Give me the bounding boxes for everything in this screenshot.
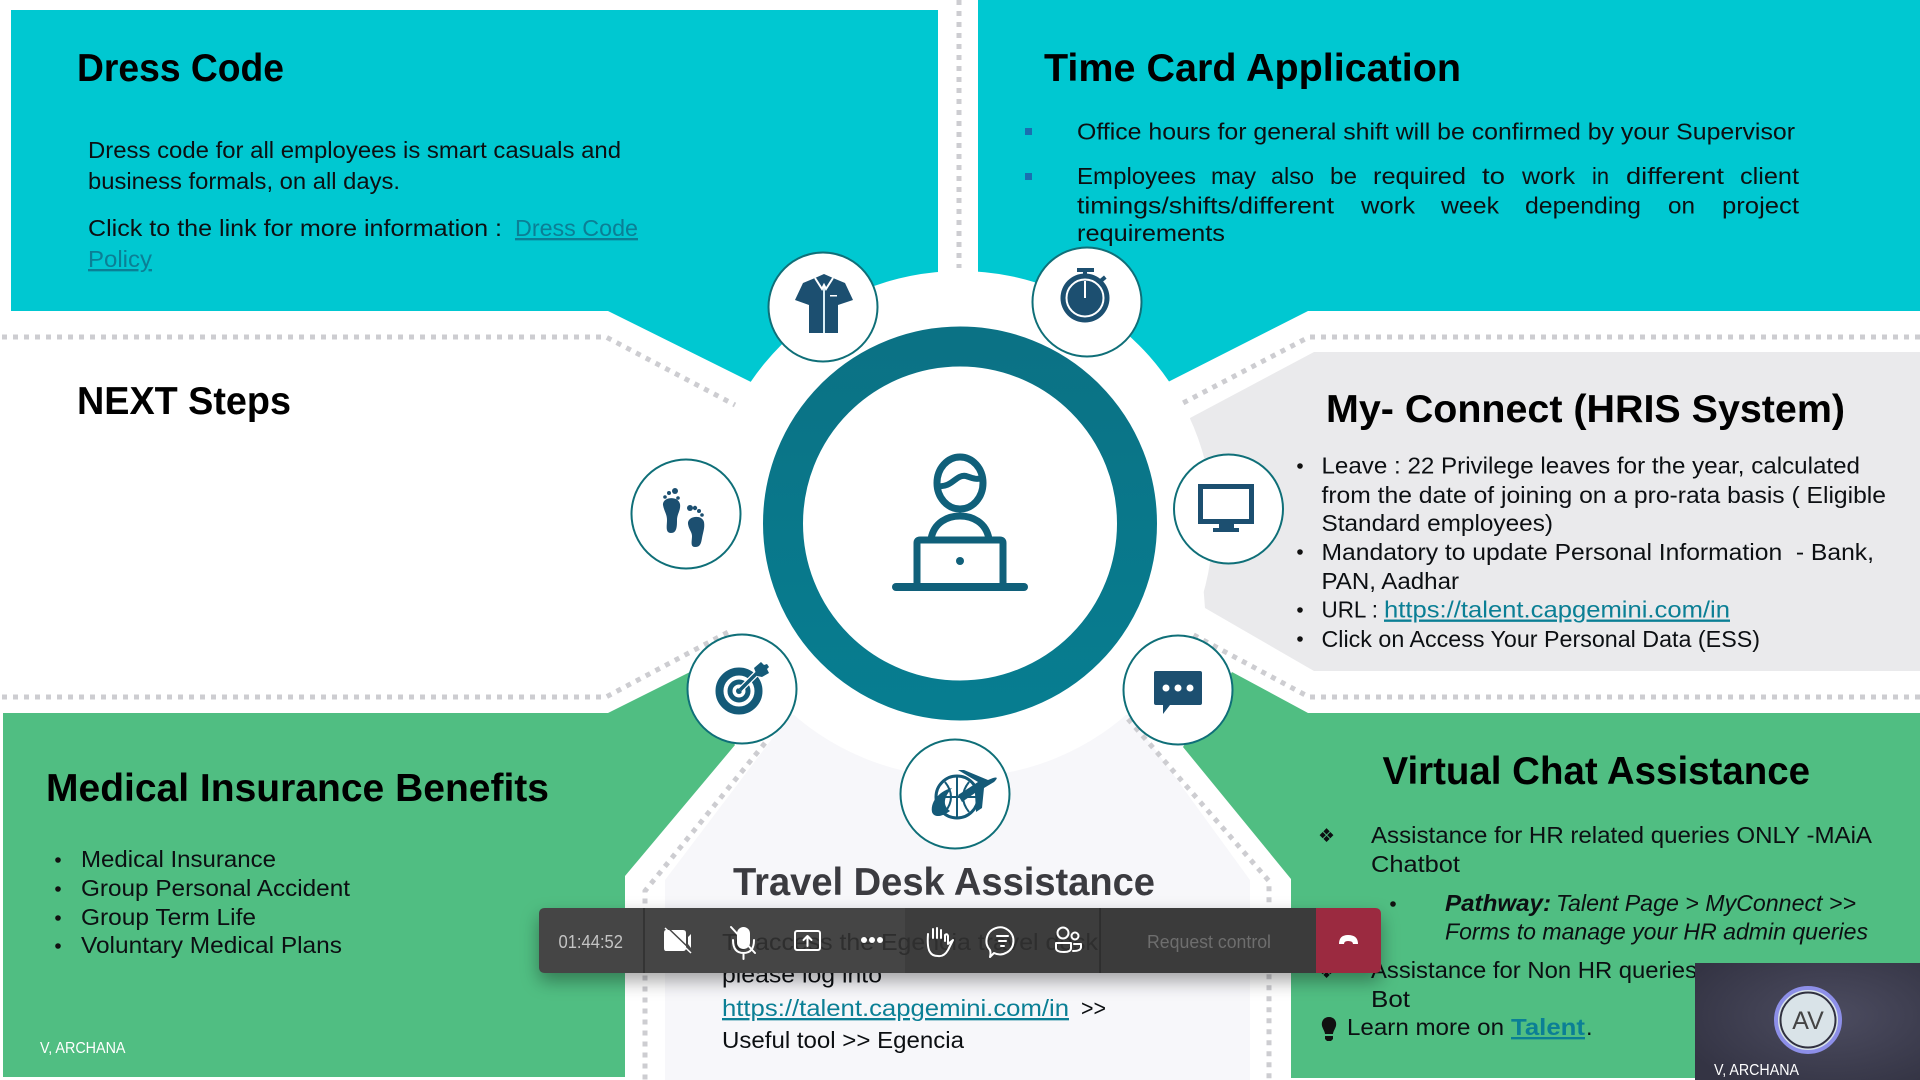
meeting toolbar: 01:44:52 [558,932,623,952]
dotted connector stub [956,0,962,268]
text: time card bullets: week [1440,192,1499,218]
text: my connect list: Click on Access Your Personal Data (ESS) [1322,626,1760,652]
central white disc [707,271,1213,777]
text: time card bullets: Office hours for general shift will be confirmed by your Supervisor [1077,118,1795,144]
presenter tile: V, ARCHANA [1714,1062,1799,1079]
node: time card stopwatch [1032,248,1142,356]
panel: travel desk background [665,715,1250,1080]
text: virtual chat list: Assistance for HR related queries ONLY -MAiA [1371,822,1872,848]
heading: virtual chat assistance: Virtual Chat Assistance [1382,750,1810,793]
text: virtual chat list: ❖ [1318,825,1335,847]
node: virtual chat bubble [1124,636,1232,744]
heading: medical insurance benefits: Medical Insurance Benefits [46,767,549,810]
panel: time card background [978,0,1920,382]
node: medical target [688,634,796,744]
text: travel desk body [722,962,1106,1053]
text: time card bullets: be [1330,163,1357,189]
icon: camera off [664,926,692,953]
text: virtual chat list: Pathway: [1445,890,1551,916]
text: travel desk body: please log into [722,962,882,988]
text: time card bullets: work [1521,163,1575,189]
text: virtual chat list: . [1586,1014,1593,1040]
text: virtual chat list: Chatbot [1371,851,1461,877]
text: time card bullets: timings/shifts/different [1077,192,1335,218]
text: virtual chat list: Learn more on [1347,1014,1504,1040]
text: time card bullets: Employees [1077,163,1196,189]
text: dress code body: business formals, on all days. [88,168,400,194]
text: time card bullets: also [1271,163,1314,189]
text: dress code body: Dress code for all employees is smart casuals and [88,137,621,163]
text: my connect list: URL : [1322,596,1378,622]
text: time card bullets: different [1626,163,1725,189]
text: time card bullets: to [1482,163,1505,189]
text: dress code body [88,137,638,272]
panel: virtual chat background [1183,672,1920,1078]
presenter name: V, ARCHANA [40,1040,126,1057]
text: my connect list [1297,452,1886,652]
heading: dress code: Dress Code [77,47,284,90]
text: travel desk body: https://talent.capgemini.com/in [722,995,1069,1021]
text: my connect list: https://talent.capgemini.com/in [1384,596,1730,622]
text: time card bullets: requirements [1077,220,1225,246]
icon: person at laptop [892,457,1028,591]
text: time card bullets: may [1211,163,1256,189]
icon: chat [986,927,1013,957]
presenter tile [1695,963,1920,1080]
text: my connect list: PAN, Aadhar [1322,568,1459,594]
panel: medical insurance background [3,672,735,1077]
text: time card bullets: in [1592,163,1609,189]
icon: share screen [795,931,820,950]
meeting toolbar: Request control [1147,932,1271,952]
text: virtual chat list: Forms to manage your HR admin queries [1445,918,1868,944]
heading: time card application: Time Card Application [1044,47,1461,90]
text: medical list: Group Personal Accident [81,875,350,901]
presenter tile: AV [1792,1007,1824,1035]
text: virtual chat list: Assistance for Non HR queries [1371,957,1697,983]
text: my connect list: from the date of joining on a pro-rata basis ( Eligible [1322,482,1886,508]
central ring [783,346,1137,700]
heading: travel desk assistance: Travel Desk Assistance [733,861,1155,904]
text: medical list: Voluntary Medical Plans [81,932,342,958]
text: dress code body: Policy [88,246,152,272]
node: dress code shirt [768,252,878,362]
text: travel desk line seen through toolbar: To access the Egencia travel desk [722,929,1098,955]
heading: my connect: My- Connect (HRIS System) [1326,388,1845,431]
text: time card bullets: depending [1525,192,1641,218]
text: time card bullets: project [1722,192,1800,218]
text: virtual chat list: Bot [1371,986,1411,1012]
icon: hang up [1339,935,1358,944]
node: my connect monitor [1174,454,1283,564]
text: medical list: Group Term Life [81,904,256,930]
node: next steps footprints [632,460,740,568]
panel: dress code background [11,10,938,382]
text: virtual chat list [1318,822,1872,1041]
text: dress code body: Dress Code [515,215,638,241]
text: my connect list: Mandatory to update Personal Information - Bank, [1322,539,1874,565]
text: virtual chat list: Talent [1511,1014,1585,1040]
text: medical list: Medical Insurance [81,846,276,872]
text: time card bullets [1025,118,1800,246]
text: travel desk body: Useful tool >> Egencia [722,1027,965,1053]
text: my connect list: Standard employees) [1322,510,1553,536]
text: my connect list: Leave : 22 Privilege leaves for the year, calculated [1322,452,1860,478]
meeting toolbar [539,908,1381,973]
icon: microphone off [731,927,755,959]
icon: more options [861,937,883,943]
icon: raise hand [928,928,953,956]
icon: participants [1056,928,1081,952]
text: time card bullets: on [1668,192,1695,218]
panel: my connect background [1190,352,1920,671]
text: dress code body: Click to the link for more information : [88,215,502,241]
heading: next steps: NEXT Steps [77,380,291,423]
text: virtual chat list: Talent Page > MyConnect >> [1556,890,1856,916]
text: travel desk body: >> [1081,995,1106,1021]
node: travel desk globe and plane [900,740,1010,848]
text: time card bullets: client [1740,163,1799,189]
text: medical list [55,846,350,958]
text: time card bullets: work [1360,192,1415,218]
text: time card bullets: required [1373,163,1466,189]
text: virtual chat list: ❖ [1318,961,1335,983]
